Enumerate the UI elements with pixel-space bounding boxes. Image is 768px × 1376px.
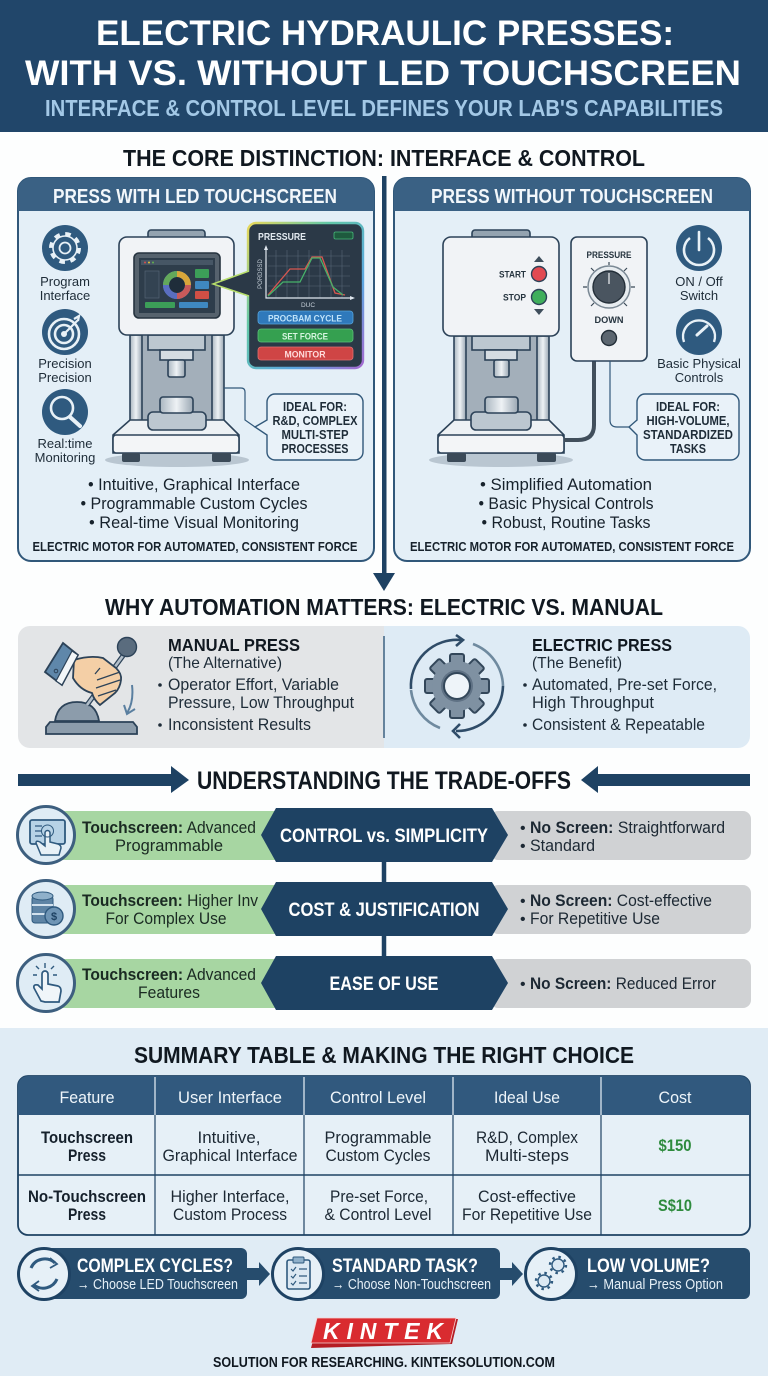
touchscreen text <box>82 965 256 1002</box>
start and stop buttons <box>499 256 546 315</box>
no screen text: No Screen: Reduced Error <box>530 974 716 993</box>
button: set force: SET FORCE <box>282 332 328 342</box>
icon: power switch <box>676 225 722 271</box>
panel: press with LED touchscreen <box>18 178 374 561</box>
icon: gear program interface <box>42 225 88 271</box>
manual press text: (The Alternative) <box>168 655 282 672</box>
label: program interface: Program <box>40 274 90 289</box>
callout: ideal for R&D: PROCESSES <box>282 442 348 456</box>
table row: no-touchscreen press: Press <box>68 1205 106 1224</box>
no screen text: • <box>520 893 526 910</box>
no screen text: For Repetitive Use <box>530 909 660 928</box>
bullet list: touchscreen features: • Intuitive, Graphical Interface <box>88 476 300 494</box>
table row: touchscreen press: R&D, Complex <box>476 1128 578 1147</box>
table row: no-touchscreen press: Custom Process <box>173 1205 287 1224</box>
title <box>25 14 741 93</box>
manual press text: Operator Effort, Variable <box>168 675 339 694</box>
icon: touch tablet <box>18 806 74 864</box>
bullet list: touchscreen features: • Programmable Custom Cycles <box>80 495 308 513</box>
icon: database coins: $ <box>51 911 57 923</box>
footer note: ELECTRIC MOTOR FOR AUTOMATED, CONSISTENT FORCE <box>410 540 734 554</box>
touchscreen text: Touchscreen: Advanced <box>82 818 256 837</box>
control box: DOWN <box>594 315 624 326</box>
machine: physical button press <box>429 230 573 467</box>
bullet list: no-screen features: • Simplified Automation <box>480 476 652 494</box>
row: ease of use: EASE OF USE <box>330 973 438 995</box>
icon: database coins <box>18 880 74 938</box>
touchscreen text: For Complex Use <box>106 909 226 928</box>
label: program interface: Interface <box>40 288 90 303</box>
table row: touchscreen press: $150 <box>658 1136 692 1155</box>
table header row <box>60 1088 692 1107</box>
footer note: ELECTRIC MOTOR FOR AUTOMATED, CONSISTENT FORCE <box>32 540 358 554</box>
bullet list: touchscreen features <box>80 476 308 532</box>
arrow: central vertical <box>373 176 395 591</box>
button: program cycle: PROCBAM CYCLE <box>268 314 342 324</box>
no screen text: Standard <box>530 836 595 855</box>
touchscreen text: Programmable <box>115 836 223 855</box>
electric press text: Consistent & Repeatable <box>532 715 705 734</box>
label: on/off switch: ON / Off <box>675 274 723 289</box>
label: precision: Precision <box>38 356 92 371</box>
label: on/off switch: Switch <box>680 288 718 303</box>
table row: touchscreen press: Press <box>68 1146 106 1165</box>
title: WITH VS. WITHOUT LED TOUCHSCREEN <box>25 54 741 93</box>
manual press text: Pressure, Low Throughput <box>168 693 354 712</box>
icon: gauge <box>676 309 722 355</box>
electric press text: Automated, Pre-set Force, <box>532 675 717 694</box>
bullet list: no-screen features: • Basic Physical Controls <box>478 495 654 513</box>
button: monitor: MONITOR <box>284 350 326 360</box>
bullet list: no-screen features <box>478 476 654 532</box>
arrow: step two to three <box>500 1262 523 1286</box>
icon: pointing hand <box>18 954 74 1012</box>
flow: decision guide <box>18 1248 750 1300</box>
label: basic physical controls: Basic Physical <box>657 356 741 371</box>
table row: no-touchscreen press: S$10 <box>658 1196 692 1215</box>
callout: ideal for R&D: R&D, COMPLEX <box>272 414 358 428</box>
arrow: trade-offs left <box>18 766 189 793</box>
section: summary and choice <box>0 1028 768 1376</box>
table header row: User Interface <box>178 1088 282 1107</box>
callout: ideal for high volume <box>610 361 739 460</box>
manual press text: MANUAL PRESS <box>168 635 300 655</box>
title: ELECTRIC HYDRAULIC PRESSES: <box>96 14 674 53</box>
no screen text: • <box>520 911 526 928</box>
connector between trade-off rows <box>382 860 386 958</box>
electric press text: (The Benefit) <box>532 655 622 672</box>
table row: no-touchscreen press: No-Touchscreen <box>28 1187 146 1206</box>
callout: ideal for R&D: IDEAL FOR: <box>283 400 347 414</box>
pill: low volume: LOW VOLUME? <box>587 1256 710 1277</box>
manual press text <box>158 635 354 734</box>
row: control vs simplicity <box>18 806 751 864</box>
callout: pressure graph popup: PRESSURE <box>258 232 306 243</box>
electric press text: ELECTRIC PRESS <box>532 635 672 655</box>
heading: understanding the trade-offs: UNDERSTANDING THE TRADE-OFFS <box>197 767 571 795</box>
table row: touchscreen press: Programmable <box>324 1128 432 1147</box>
table row: touchscreen press: Graphical Interface <box>162 1146 298 1165</box>
pill: low volume: → Manual Press Option <box>587 1276 723 1293</box>
pill: low volume <box>526 1248 750 1300</box>
table header row: Ideal Use <box>494 1088 560 1107</box>
button: set force <box>258 329 353 342</box>
heading: summary table: SUMMARY TABLE & MAKING THE RIGHT CHOICE <box>134 1042 634 1068</box>
panel: press without touchscreen <box>394 178 750 561</box>
touchscreen text <box>82 891 258 928</box>
touchscreen text: Touchscreen: Higher Inv <box>82 891 258 910</box>
pill: complex cycles: COMPLEX CYCLES? <box>77 1256 233 1277</box>
callout: ideal for high volume: STANDARDIZED <box>643 428 733 442</box>
label: real-time monitoring: Monitoring <box>35 450 95 465</box>
no screen text <box>520 818 725 855</box>
icon: hand on lever <box>45 638 137 734</box>
line chart: DUC <box>301 302 315 309</box>
table row: no-touchscreen press: For Repetitive Use <box>462 1205 592 1224</box>
icon: magnifier monitoring <box>42 389 88 435</box>
callout: ideal for R&D <box>224 388 363 460</box>
no screen text <box>520 891 712 928</box>
touchscreen display <box>134 253 220 318</box>
panel: electric vs manual <box>18 626 750 748</box>
label: precision: Precision <box>38 370 92 385</box>
heading: why automation matters: WHY AUTOMATION MATTERS: ELECTRIC VS. MANUAL <box>105 594 663 620</box>
control box: PRESSURE <box>586 250 632 261</box>
manual press text: Inconsistent Results <box>168 715 311 734</box>
callout: ideal for R&D: MULTI-STEP <box>282 428 348 442</box>
table row: touchscreen press: Multi-steps <box>485 1146 569 1165</box>
row: cost and justification: COST & JUSTIFICATION <box>288 899 480 921</box>
electric press text <box>523 635 717 734</box>
pill: complex cycles <box>18 1248 247 1300</box>
table row: no-touchscreen press: Higher Interface, <box>170 1187 290 1206</box>
pill: standard task <box>272 1248 500 1300</box>
table header row: Control Level <box>330 1088 426 1107</box>
machine: touchscreen press <box>105 230 249 467</box>
no screen text: • <box>520 838 526 855</box>
callout: pressure graph popup <box>213 223 363 368</box>
pill: standard task: → Choose Non-Touchscreen <box>332 1276 491 1293</box>
touchscreen text: Features <box>138 983 200 1002</box>
no screen text: • <box>520 820 526 837</box>
callout: ideal for high volume: IDEAL FOR: <box>656 400 720 414</box>
line chart: PORDSSD <box>258 258 264 289</box>
label: real-time monitoring: Real:time <box>38 436 92 451</box>
pill: complex cycles: → Choose LED Touchscreen <box>77 1276 238 1293</box>
touchscreen text: Touchscreen: Advanced <box>82 965 256 984</box>
table row: no-touchscreen press: & Control Level <box>324 1205 432 1224</box>
panel heading: PRESS WITH LED TOUCHSCREEN <box>53 186 337 208</box>
start and stop buttons: START <box>499 270 526 280</box>
cable <box>564 360 594 440</box>
table row: no-touchscreen press: Cost-effective <box>478 1187 576 1206</box>
label: basic physical controls: Controls <box>675 370 724 385</box>
table row: no-touchscreen press <box>28 1187 692 1224</box>
logo: KINTEK: KINTEK <box>323 1318 444 1344</box>
table row: no-touchscreen press: Pre-set Force, <box>330 1187 428 1206</box>
bullet list: touchscreen features: • Real-time Visual Monitoring <box>89 514 299 532</box>
row: ease of use <box>18 954 751 1012</box>
table header row: Cost <box>658 1088 692 1107</box>
electric press text: High Throughput <box>532 693 654 712</box>
row: cost and justification <box>18 880 751 938</box>
callout: ideal for high volume: TASKS <box>670 442 706 456</box>
no screen text: No Screen: Straightforward <box>530 818 725 837</box>
arrow: trade-offs right <box>581 766 750 793</box>
pressure dial <box>583 262 635 308</box>
header banner <box>0 0 768 132</box>
table row: touchscreen press: Intuitive, <box>198 1128 260 1147</box>
bullet list: no-screen features: • Robust, Routine Tasks <box>482 514 650 532</box>
table row: touchscreen press: Touchscreen <box>41 1128 133 1147</box>
heading: core distinction: THE CORE DISTINCTION: INTERFACE & CONTROL <box>123 145 645 171</box>
no screen text: No Screen: Cost-effective <box>530 891 712 910</box>
footer text: SOLUTION FOR RESEARCHING. KINTEKSOLUTION.COM <box>213 1355 555 1371</box>
arrow: step one to two <box>247 1262 270 1286</box>
summary table <box>18 1076 750 1235</box>
touchscreen text <box>82 818 256 855</box>
icon: gear with cycle arrows <box>411 635 503 738</box>
row: control vs simplicity: CONTROL vs. SIMPLICITY <box>280 825 488 847</box>
control box <box>571 237 647 361</box>
line chart <box>258 245 355 309</box>
panel heading: PRESS WITHOUT TOUCHSCREEN <box>431 186 713 208</box>
no screen text: • <box>520 976 526 993</box>
icon: target precision <box>42 309 88 355</box>
table row: touchscreen press: Custom Cycles <box>326 1146 430 1165</box>
table row: touchscreen press <box>41 1128 692 1165</box>
pill: standard task: STANDARD TASK? <box>332 1256 478 1277</box>
callout: ideal for high volume: HIGH-VOLUME, <box>646 414 730 428</box>
button: monitor <box>258 347 353 360</box>
start and stop buttons: STOP <box>503 292 527 304</box>
table header row: Feature <box>60 1088 114 1107</box>
